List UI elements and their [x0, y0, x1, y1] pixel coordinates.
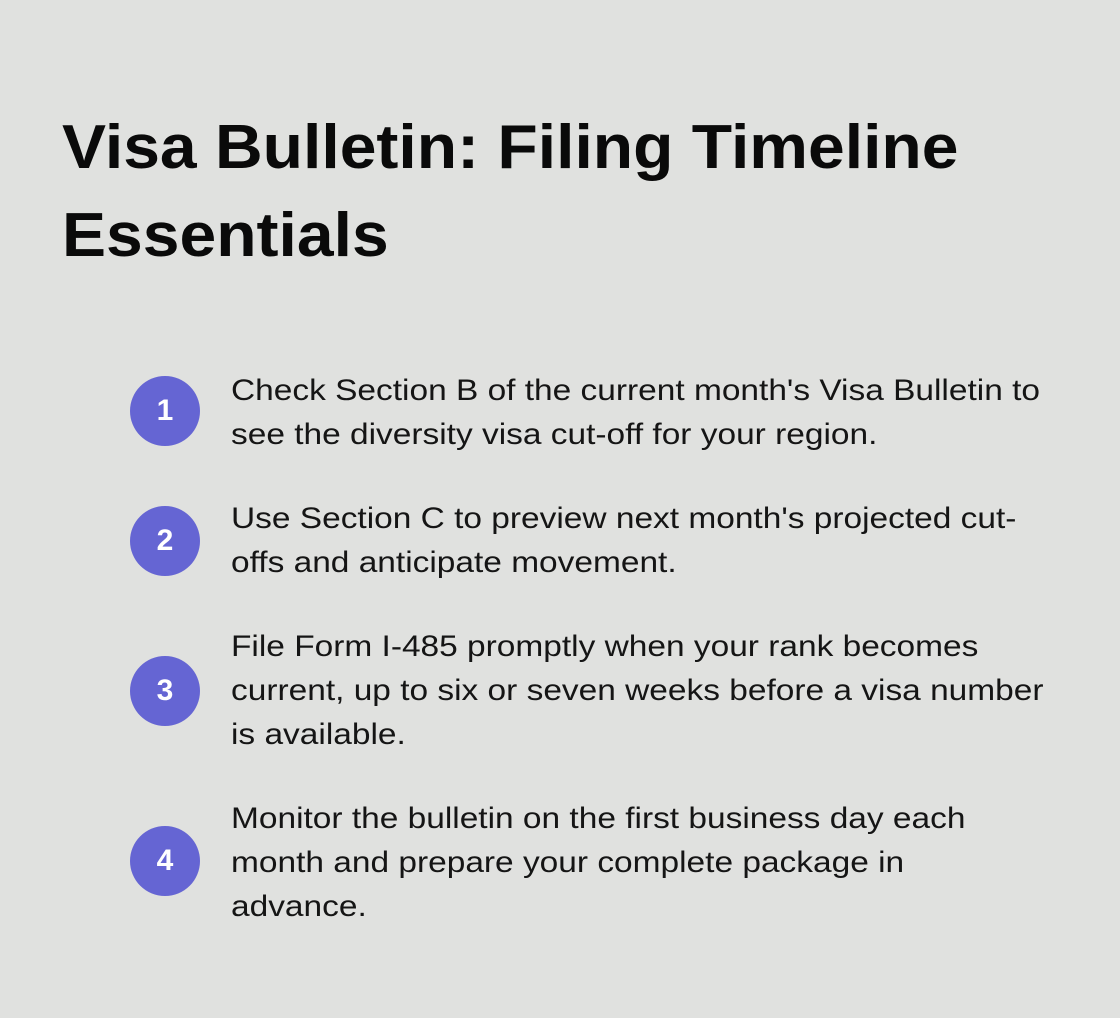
text: step 2	[231, 502, 1016, 579]
text: step 1: see the diversity visa cut-off for your region.	[231, 418, 877, 451]
text: step 3: is available.	[231, 718, 406, 751]
step 3	[130, 630, 1043, 751]
circle: 2: 2	[157, 524, 173, 557]
step 1	[130, 374, 1040, 451]
text: step 4: advance.	[231, 890, 367, 923]
circle: 2	[130, 506, 200, 576]
circle: 3: 3	[157, 674, 173, 707]
text: step 4: Monitor the bulletin on the first business day each	[231, 802, 965, 835]
title: Visa Bulletin: Filing Timeline	[62, 113, 958, 182]
text: step 4	[231, 802, 965, 923]
step 4	[130, 802, 965, 923]
title	[62, 113, 958, 270]
text: step 3: current, up to six or seven weeks before a visa number	[231, 674, 1043, 707]
circle: 4: 4	[157, 844, 173, 877]
text: step 3	[231, 630, 1043, 751]
text: step 2: Use Section C to preview next month's projected cut-	[231, 502, 1016, 535]
circle: 1: 1	[157, 394, 173, 427]
title: Essentials	[62, 201, 389, 270]
step 2	[130, 502, 1016, 579]
circle: 1	[130, 376, 200, 446]
text: step 1	[231, 374, 1040, 451]
circle: 4	[130, 826, 200, 896]
circle: 3	[130, 656, 200, 726]
text: step 2: offs and anticipate movement.	[231, 546, 677, 579]
text: step 1: Check Section B of the current month's Visa Bulletin to	[231, 374, 1040, 407]
text: step 3: File Form I-485 promptly when your rank becomes	[231, 630, 978, 663]
text: step 4: month and prepare your complete package in	[231, 846, 904, 879]
